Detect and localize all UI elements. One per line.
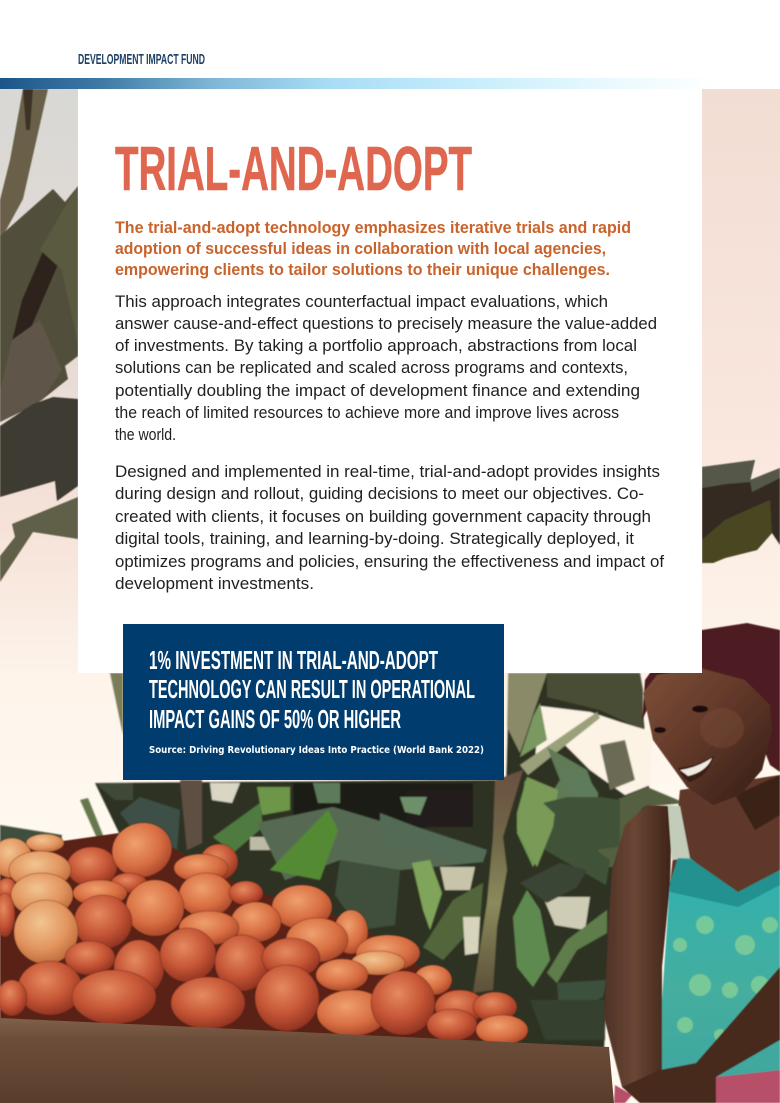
body paragraph 2: during design and rollout, guiding decisions to meet our objectives. Co- (115, 485, 644, 503)
body paragraph 1: the reach of limited resources to achieve more and improve lives across (115, 404, 619, 422)
body paragraph 2 (115, 463, 665, 593)
body paragraph 2: optimizes programs and policies, ensuring the effectiveness and impact of (115, 553, 665, 571)
folded arm and hands (622, 967, 780, 1103)
woman (604, 623, 780, 1103)
body paragraph 1: answer cause-and-effect questions to precisely measure the value-added (115, 315, 657, 333)
neck and chest (670, 775, 780, 898)
body paragraph 1: potentially doubling the impact of development finance and extending (115, 382, 640, 400)
callout heading (149, 647, 475, 734)
header label: DEVELOPMENT IMPACT FUND (78, 51, 205, 68)
body paragraph 2: development investments. (115, 575, 314, 593)
face (643, 668, 772, 805)
right banana leaf (702, 460, 780, 563)
body paragraph 1: the world. (115, 426, 176, 444)
foliage mass (0, 673, 685, 1050)
panel: main text card (78, 89, 702, 673)
body paragraph 2: Designed and implemented in real-time, trial-and-adopt provides insights (115, 463, 660, 481)
tomato pile (0, 816, 530, 1045)
body paragraph 1: This approach integrates counterfactual impact evaluations, which (115, 293, 608, 311)
eyes and smile (654, 706, 744, 782)
body paragraph 1: solutions can be replicated and scaled across programs and contexts, (115, 359, 628, 377)
lead paragraph (115, 218, 631, 279)
lead paragraph: adoption of successful ideas in collaboration with local agencies, (115, 239, 606, 258)
body paragraph 1 (115, 293, 657, 444)
lead paragraph: empowering clients to tailor solutions to their unique challenges. (115, 260, 610, 279)
skirt (614, 1070, 780, 1103)
hair (642, 623, 780, 772)
callout heading: IMPACT GAINS OF 50% OR HIGHER (149, 706, 401, 734)
body paragraph 2: digital tools, training, and learning-by-doing. Strategically deployed, it (115, 530, 635, 548)
lead paragraph: The trial-and-adopt technology emphasizes iterative trials and rapid (115, 218, 631, 237)
body paragraph 2: created with clients, it focuses on building government capacity through (115, 508, 651, 526)
wooden crate (0, 1018, 614, 1103)
gradient band (0, 78, 780, 89)
body paragraph 1: of investments. By taking a portfolio approach, abstractions from local (115, 337, 637, 355)
left banana leaves (0, 89, 78, 582)
title: TRIAL-AND-ADOPT (115, 135, 472, 204)
dress (662, 858, 780, 1078)
callout heading: TECHNOLOGY CAN RESULT IN OPERATIONAL (149, 676, 475, 704)
arm (604, 805, 671, 1095)
callout: key statistic (123, 624, 504, 780)
page header band (0, 0, 780, 78)
callout source: Source: Driving Revolutionary Ideas Into Practice (World Bank 2022) (149, 745, 484, 756)
dress strap (668, 805, 690, 860)
callout heading: 1% INVESTMENT IN TRIAL-AND-ADOPT (149, 647, 438, 675)
